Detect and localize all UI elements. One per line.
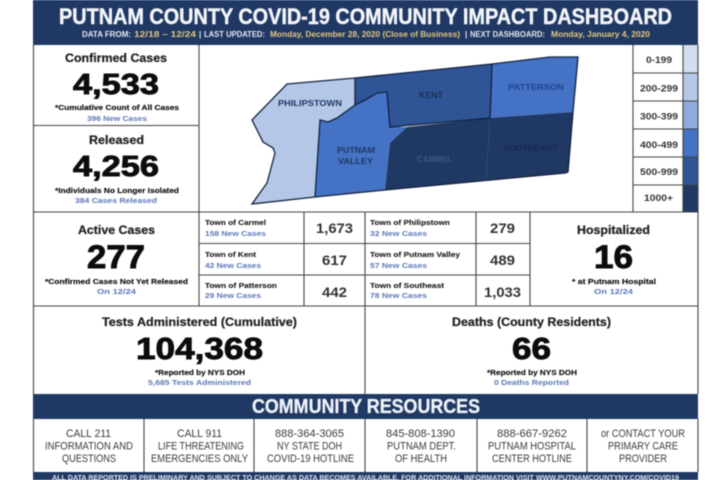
resource: call 911 (151, 428, 249, 465)
panel: deaths: *Reported by NYS DOH (487, 370, 577, 377)
map label: Philipstown: PHILIPSTOWN (278, 98, 342, 108)
row: Putnam Valley: 57 New Cases (370, 263, 427, 270)
map label: Patterson: PATTERSON (508, 82, 564, 92)
data dates line: Monday, January 4, 2020 (551, 30, 651, 39)
panel: hospitalized (572, 223, 656, 296)
data dates line: LAST UPDATED: (204, 30, 265, 39)
data dates line: | (199, 30, 201, 39)
map label: Southeast: SOUTHEAST (503, 143, 559, 153)
panel: confirmed cases (55, 51, 179, 123)
legend labels: 0-199 (646, 55, 672, 66)
resource: call 211: CALL 211 (66, 428, 111, 440)
resource: NY State DOH hotline: COVID-19 HOTLINE (267, 453, 354, 465)
map region: Philipstown (252, 78, 355, 204)
data dates line (82, 30, 651, 39)
resource: call 211: INFORMATION AND (45, 440, 133, 452)
resource: Putnam Dept. of Health: 845-808-1390 (386, 428, 455, 440)
map label: Carmel: CARMEL (417, 154, 452, 164)
panel: active cases: *Confirmed Cases Not Yet Released (45, 279, 188, 286)
panel: hospitalized: * at Putnam Hospital (572, 279, 656, 286)
legend labels: 500-999 (640, 167, 678, 178)
row: Philipstown: Town of Philipstown (370, 218, 450, 227)
resource: Putnam Hospital hotline (488, 428, 576, 465)
row: Philipstown (370, 218, 515, 238)
panel: active cases: 277 (87, 239, 145, 275)
data dates line: | (465, 30, 467, 39)
panel: released: Released (89, 133, 144, 147)
map label: Kent: KENT (419, 90, 444, 100)
panel: hospitalized: On 12/24 (594, 289, 633, 296)
row: Kent: 42 New Cases (205, 263, 261, 270)
panel: tests administered: 5,685 Tests Administered (148, 380, 251, 387)
row: Patterson: 442 (322, 284, 347, 300)
panel: released: 384 Cases Released (75, 198, 157, 205)
panel: confirmed cases: *Cumulative Count of All Cases (55, 105, 179, 112)
footer disclaimer (33, 472, 698, 480)
resource: primary care provider: PROVIDER (619, 453, 667, 465)
map label: Putnam Valley (337, 145, 375, 166)
panel: active cases (45, 223, 188, 296)
data dates line: Monday, December 28, 2020 (Close of Business) (270, 30, 460, 39)
panel: released: *Individuals No Longer Isolated (55, 188, 179, 195)
row: Southeast: 1,033 (484, 284, 521, 300)
panel: hospitalized: 16 (594, 239, 633, 275)
row: Philipstown: 279 (490, 220, 515, 236)
legend labels: 200-299 (640, 84, 678, 94)
map label: Putnam Valley: PUTNAM (337, 145, 375, 155)
row: Patterson: 29 New Cases (205, 293, 261, 300)
panel: hospitalized: Hospitalized (577, 223, 650, 237)
resource: NY State DOH hotline (267, 428, 354, 465)
row: Carmel: 1,673 (316, 220, 353, 236)
panel: active cases: Active Cases (78, 223, 155, 237)
panel: tests administered: *Reported by NYS DOH (155, 370, 245, 377)
legend labels (640, 55, 678, 204)
legend swatches (683, 45, 698, 212)
resource: Putnam Hospital hotline: 888-667-9262 (497, 428, 567, 440)
map outline (252, 57, 578, 204)
resource: call 911: CALL 911 (177, 428, 222, 440)
row: Putnam Valley: Town of Putnam Valley (370, 250, 461, 259)
panel: deaths: Deaths (County Residents) (452, 315, 611, 329)
resource: Putnam Dept. of Health (386, 428, 456, 465)
row: Kent: Town of Kent (205, 250, 257, 259)
row: Carmel: 158 New Cases (205, 231, 266, 238)
panel: tests administered: Tests Administered (Cumulative) (102, 315, 297, 329)
resource: Putnam Dept. of Health: OF HEALTH (395, 453, 447, 465)
data dates line: DATA FROM: (82, 30, 131, 39)
title: PUTNAM COUNTY COVID-19 COMMUNITY IMPACT DASHBOARD (59, 4, 672, 29)
panel: tests administered (102, 315, 297, 387)
data dates line: NEXT DASHBOARD: (470, 30, 545, 39)
row: Southeast: 78 New Cases (370, 293, 427, 300)
resource: primary care provider: or CONTACT YOUR (601, 428, 685, 440)
header banner (33, 0, 698, 45)
map region: Putnam Valley (315, 92, 407, 197)
panel: released: 4,256 (73, 151, 159, 183)
map region: Southeast (486, 112, 573, 180)
panel: released (55, 133, 179, 205)
community resources banner: COMMUNITY RESOURCES (252, 396, 480, 418)
resource: NY State DOH hotline: NY STATE DOH (277, 440, 342, 452)
legend labels: 400-499 (640, 140, 678, 151)
resource: Putnam Hospital hotline: PUTNAM HOSPITAL (488, 440, 576, 452)
panel: deaths (452, 315, 611, 387)
panel: active cases: On 12/24 (97, 289, 136, 296)
row: Southeast: Town of Southeast (370, 281, 445, 290)
row: Philipstown: 32 New Cases (370, 231, 427, 238)
resource: call 911: LIFE THREATENING (158, 440, 244, 452)
map region: Kent (355, 64, 492, 127)
panel: confirmed cases: 4,533 (73, 69, 159, 101)
panel: deaths: 66 (512, 331, 551, 366)
map label: Putnam Valley: VALLEY (338, 156, 373, 166)
resource: primary care provider (601, 428, 685, 465)
resource: call 211: QUESTIONS (62, 453, 116, 465)
row: Patterson: Town of Patterson (205, 281, 277, 290)
resource: call 911: EMERGENCIES ONLY (151, 453, 249, 465)
legend (640, 45, 698, 212)
panel: deaths: 0 Deaths Reported (494, 380, 569, 387)
row: Patterson (205, 281, 347, 300)
resource: Putnam Dept. of Health: PUTNAM DEPT. (387, 440, 456, 452)
panel: tests administered: 104,368 (136, 331, 263, 366)
legend labels: 300-399 (640, 112, 678, 122)
data dates line: 12/18 – 12/24 (134, 30, 197, 39)
resource: Putnam Hospital hotline: CENTER HOTLINE (492, 453, 572, 465)
panel: confirmed cases: Confirmed Cases (65, 51, 167, 65)
table: town case counts (205, 218, 521, 300)
resource: primary care provider: PRIMARY CARE (608, 440, 678, 452)
resource: NY State DOH hotline: 888-364-3065 (275, 428, 344, 440)
row: Putnam Valley (370, 250, 515, 270)
row: Carmel: Town of Carmel (205, 218, 266, 227)
row: Carmel (205, 218, 353, 238)
map region: Patterson (490, 57, 578, 118)
row: Kent (205, 250, 347, 270)
resource: call 211 (45, 428, 133, 465)
legend labels: 1000+ (644, 193, 673, 204)
community resources banner (33, 394, 698, 419)
map: Putnam County towns (252, 57, 578, 204)
map region: Carmel (385, 118, 490, 190)
row: Putnam Valley: 489 (490, 252, 515, 268)
row: Southeast (370, 281, 521, 300)
panel: confirmed cases: 396 New Cases (87, 116, 147, 123)
row: Kent: 617 (322, 252, 347, 268)
